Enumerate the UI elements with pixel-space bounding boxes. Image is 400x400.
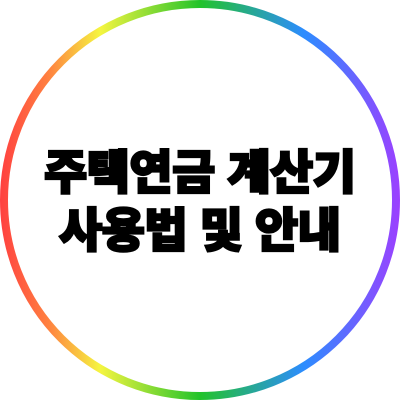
title — [44, 146, 356, 257]
title line 1: 주택연금 계산기 — [44, 146, 356, 199]
title line 2: 사용법 및 안내 — [59, 204, 341, 257]
